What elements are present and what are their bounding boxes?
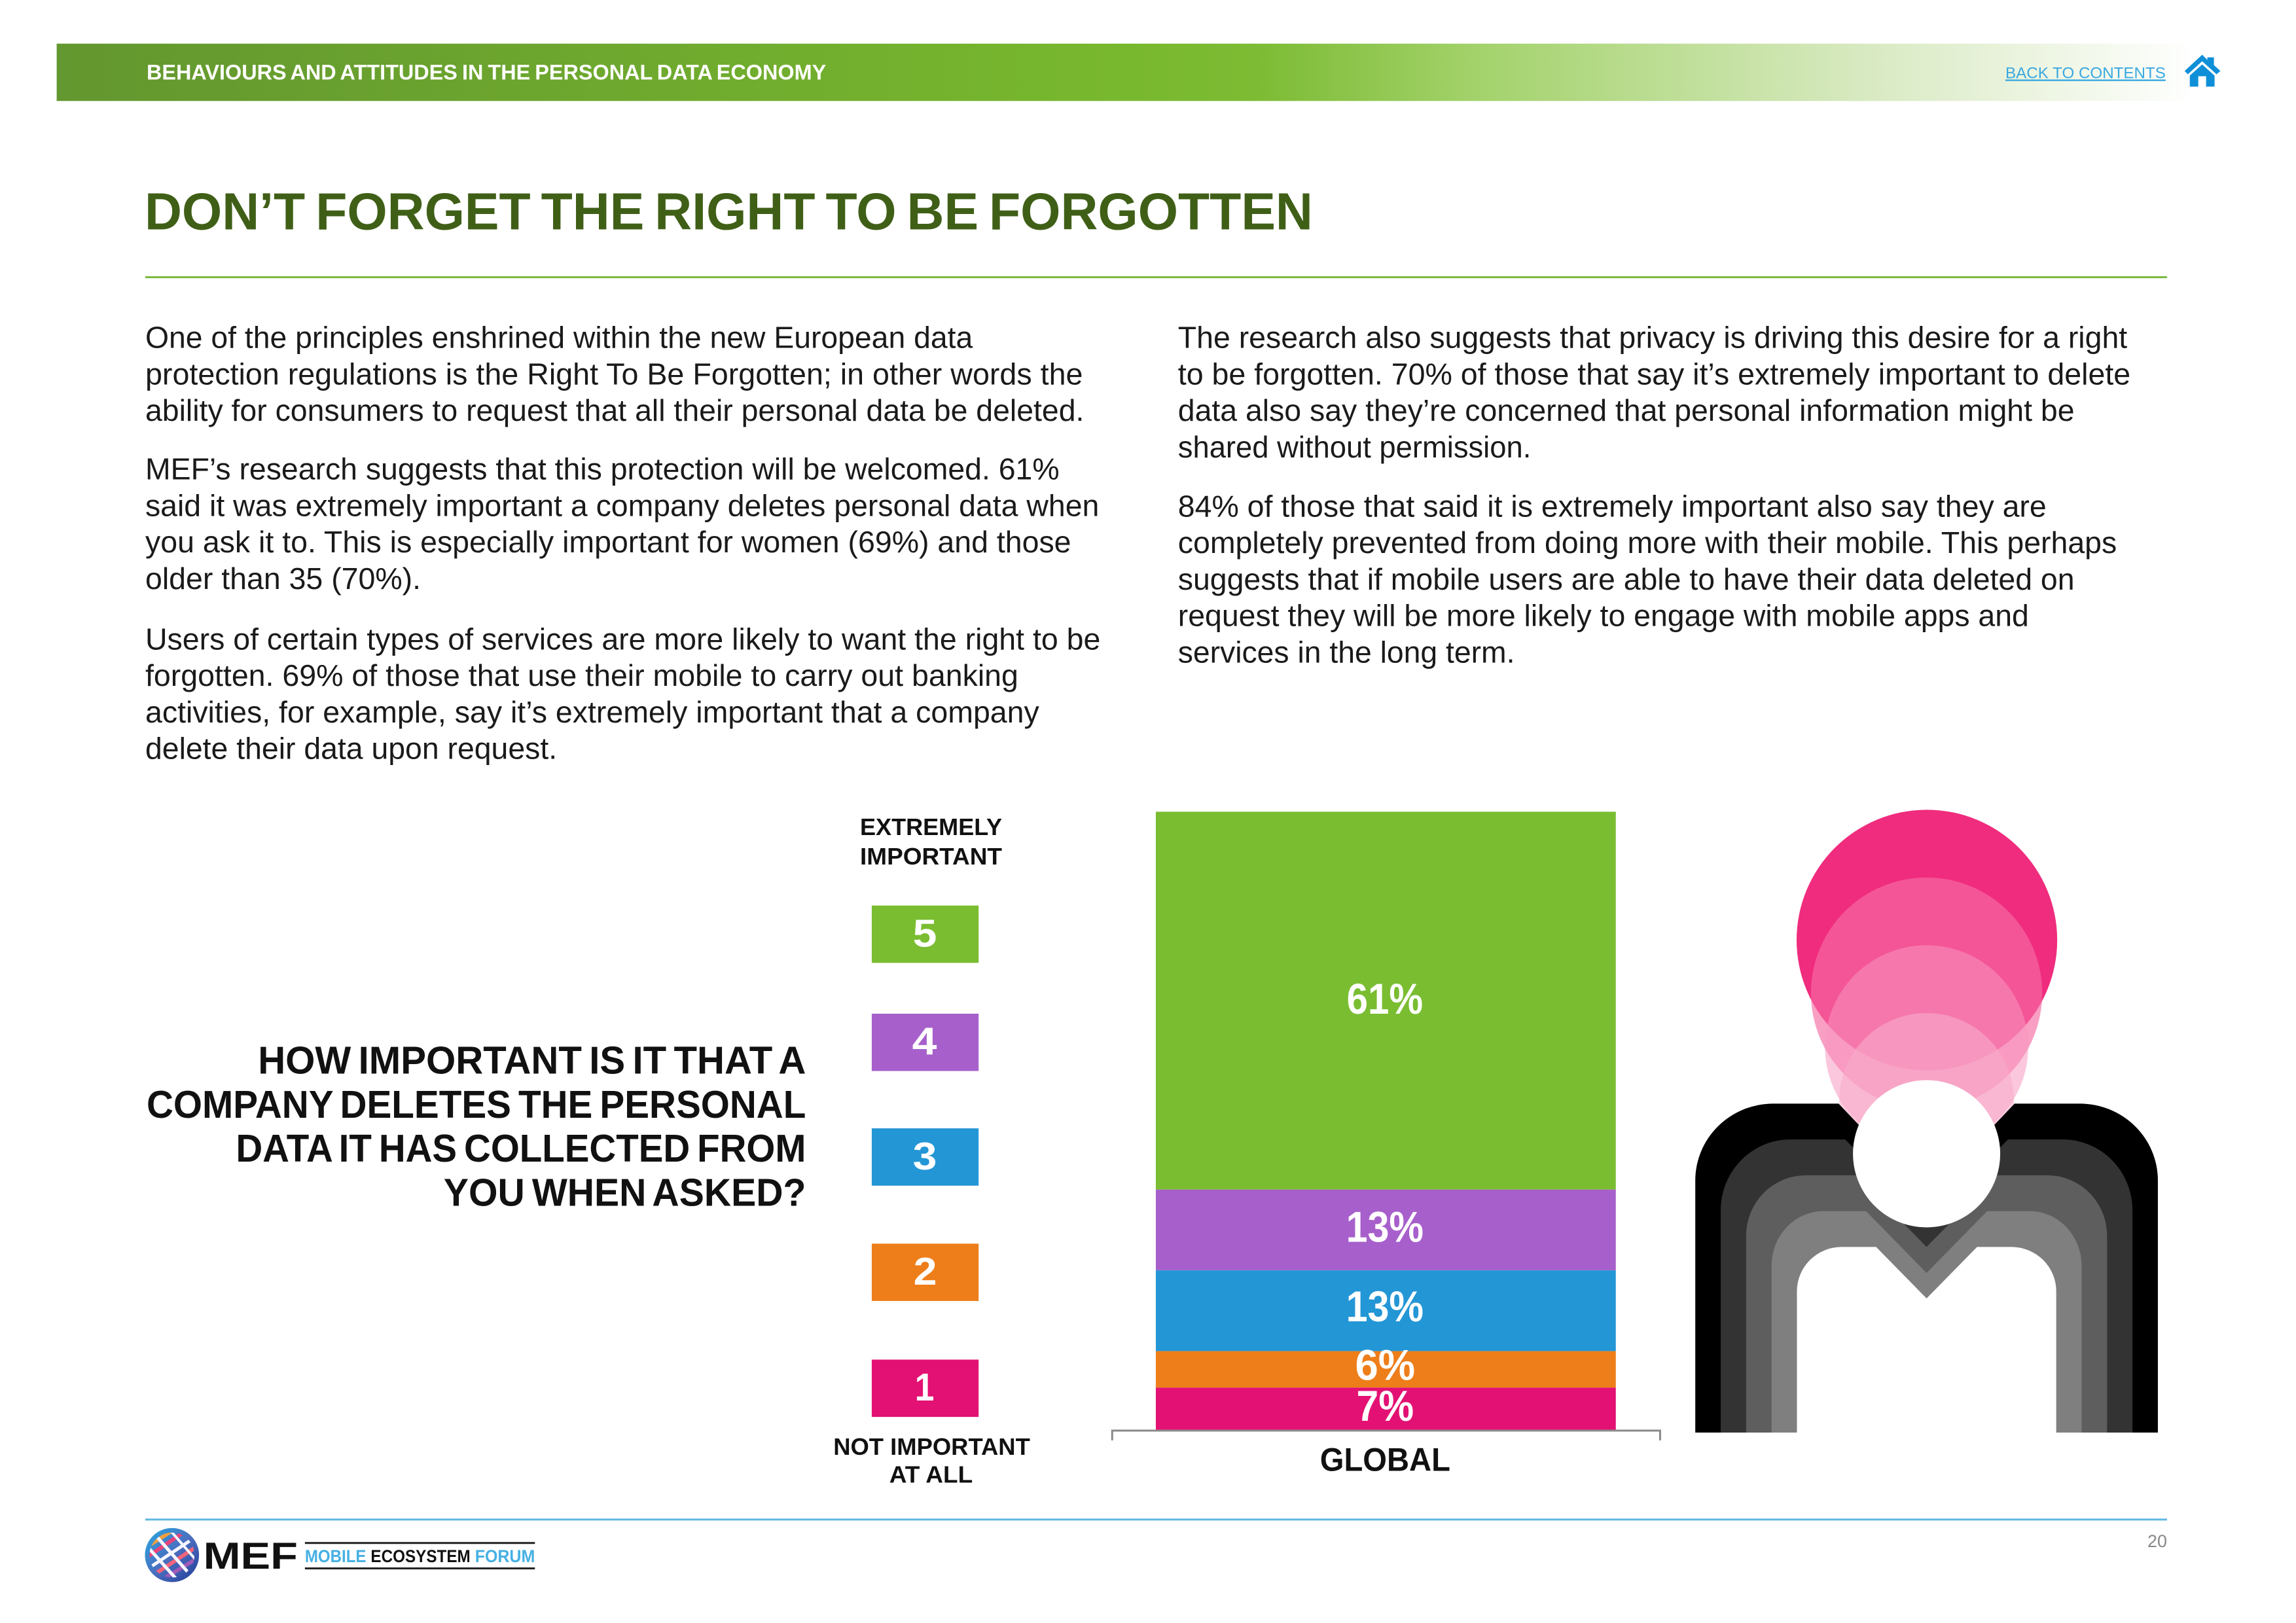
tagline: ECOSYSTEM xyxy=(370,1546,471,1566)
segment 13% blue xyxy=(1156,1270,1616,1351)
scale label: extremely important xyxy=(860,814,1002,870)
axis label: global: GLOBAL xyxy=(1320,1442,1450,1478)
survey question: COMPANY DELETES THE PERSONAL xyxy=(147,1082,806,1126)
scale key 2: 2 xyxy=(914,1249,937,1293)
text block: right column: services in the long term. xyxy=(1178,635,1515,669)
scale key 4: 4 xyxy=(912,1020,937,1063)
header band xyxy=(57,44,2195,101)
text block: right column: completely prevented from doing more with their mobile. This perhaps xyxy=(1178,526,2117,560)
survey question: DATA IT HAS COLLECTED FROM xyxy=(236,1126,806,1170)
scale label: not important at all: NOT IMPORTANT xyxy=(833,1434,1030,1460)
text block: left column: you ask it to. This is especially important for women (69%) and those xyxy=(145,525,1071,559)
title: DON’T FORGET THE RIGHT TO BE FORGOTTEN xyxy=(145,182,1313,240)
scale label: extremely important: EXTREMELY xyxy=(860,814,1002,840)
text block: left column: older than 35 (70%). xyxy=(145,562,421,596)
tagline xyxy=(305,1546,535,1566)
head xyxy=(1853,1080,2000,1227)
tagline: FORUM xyxy=(475,1546,535,1566)
scale key 1: 1 xyxy=(915,1365,934,1409)
scale label: not important at all: AT ALL xyxy=(889,1462,973,1488)
globe mark xyxy=(145,1528,200,1584)
text block: right column xyxy=(1178,321,2130,669)
text block: left column: Users of certain types of services are more likely to want the right to be xyxy=(145,622,1100,656)
text block: left column: said it was extremely important a company deletes personal data when xyxy=(145,488,1099,522)
text block: right column: The research also suggests that privacy is driving this desire for a right xyxy=(1178,321,2127,355)
segment 61%: 61% xyxy=(1347,975,1423,1023)
wordmark: MEF xyxy=(204,1535,298,1577)
pink circles xyxy=(1797,810,2058,1125)
body bands xyxy=(1695,1103,2158,1433)
scale key 2 xyxy=(872,1243,978,1301)
text block: left column xyxy=(145,321,1100,766)
lower section: chart and footer xyxy=(145,810,2167,1584)
survey question: YOU WHEN ASKED? xyxy=(444,1171,806,1215)
tagline: MOBILE xyxy=(305,1546,366,1566)
scale label: not important at all xyxy=(833,1434,1030,1488)
scale key 5: 5 xyxy=(913,911,937,955)
segment 13% purple: 13% xyxy=(1346,1203,1424,1251)
scale key 3: 3 xyxy=(913,1134,937,1178)
scale key 1 xyxy=(872,1360,978,1417)
text block: right column: 84% of those that said it is extremely important also say they are xyxy=(1178,489,2047,523)
text block: left column: One of the principles enshrined within the new European data xyxy=(145,321,973,355)
segment 6% xyxy=(1156,1341,1616,1389)
stacked bar chart xyxy=(1156,812,1616,1430)
page number: 20 xyxy=(2147,1531,2167,1551)
scale key 4 xyxy=(872,1014,978,1071)
logo: MEF xyxy=(145,1528,535,1584)
segment 7%: 7% xyxy=(1357,1382,1414,1430)
text block: left column: activities, for example, say it’s extremely important that a company xyxy=(145,695,1040,729)
segment 6%: 6% xyxy=(1355,1341,1415,1389)
text block: right column: shared without permission. xyxy=(1178,430,1531,464)
icon: person with pink head circles xyxy=(1695,810,2158,1433)
scale key 3 xyxy=(872,1128,978,1186)
text block: left column: delete their data upon request. xyxy=(145,732,557,766)
text block: right column: data also say they’re concerned that personal information might be xyxy=(1178,393,2075,427)
scale label: extremely important: IMPORTANT xyxy=(860,844,1002,870)
segment 13% blue: 13% xyxy=(1346,1283,1424,1330)
survey question xyxy=(147,1039,806,1215)
segment 13% purple xyxy=(1156,1190,1616,1270)
icon: home xyxy=(2185,55,2221,86)
text block: left column: MEF’s research suggests that this protection will be welcomed. 61% xyxy=(145,452,1060,486)
header title: BEHAVIOURS AND ATTITUDES IN THE PERSONAL DATA ECONOMY xyxy=(147,60,826,84)
segment 7% xyxy=(1156,1382,1616,1430)
text block: right column: to be forgotten. 70% of those that say it’s extremely important to delete xyxy=(1178,357,2130,391)
text block: right column: request they will be more likely to engage with mobile apps and xyxy=(1178,599,2029,633)
chart axis bracket xyxy=(1112,1431,1660,1440)
segment 61% xyxy=(1156,812,1616,1190)
text block: right column: suggests that if mobile users are able to have their data deleted on xyxy=(1178,562,2075,596)
text block: left column: ability for consumers to request that all their personal data be deleted. xyxy=(145,393,1084,427)
text block: left column: forgotten. 69% of those that use their mobile to carry out banking xyxy=(145,658,1018,692)
survey question: HOW IMPORTANT IS IT THAT A xyxy=(258,1039,806,1082)
scale key 5 xyxy=(872,906,978,963)
text block: left column: protection regulations is the Right To Be Forgotten; in other words the xyxy=(145,357,1083,391)
back to contents link: BACK TO CONTENTS xyxy=(2005,64,2166,82)
